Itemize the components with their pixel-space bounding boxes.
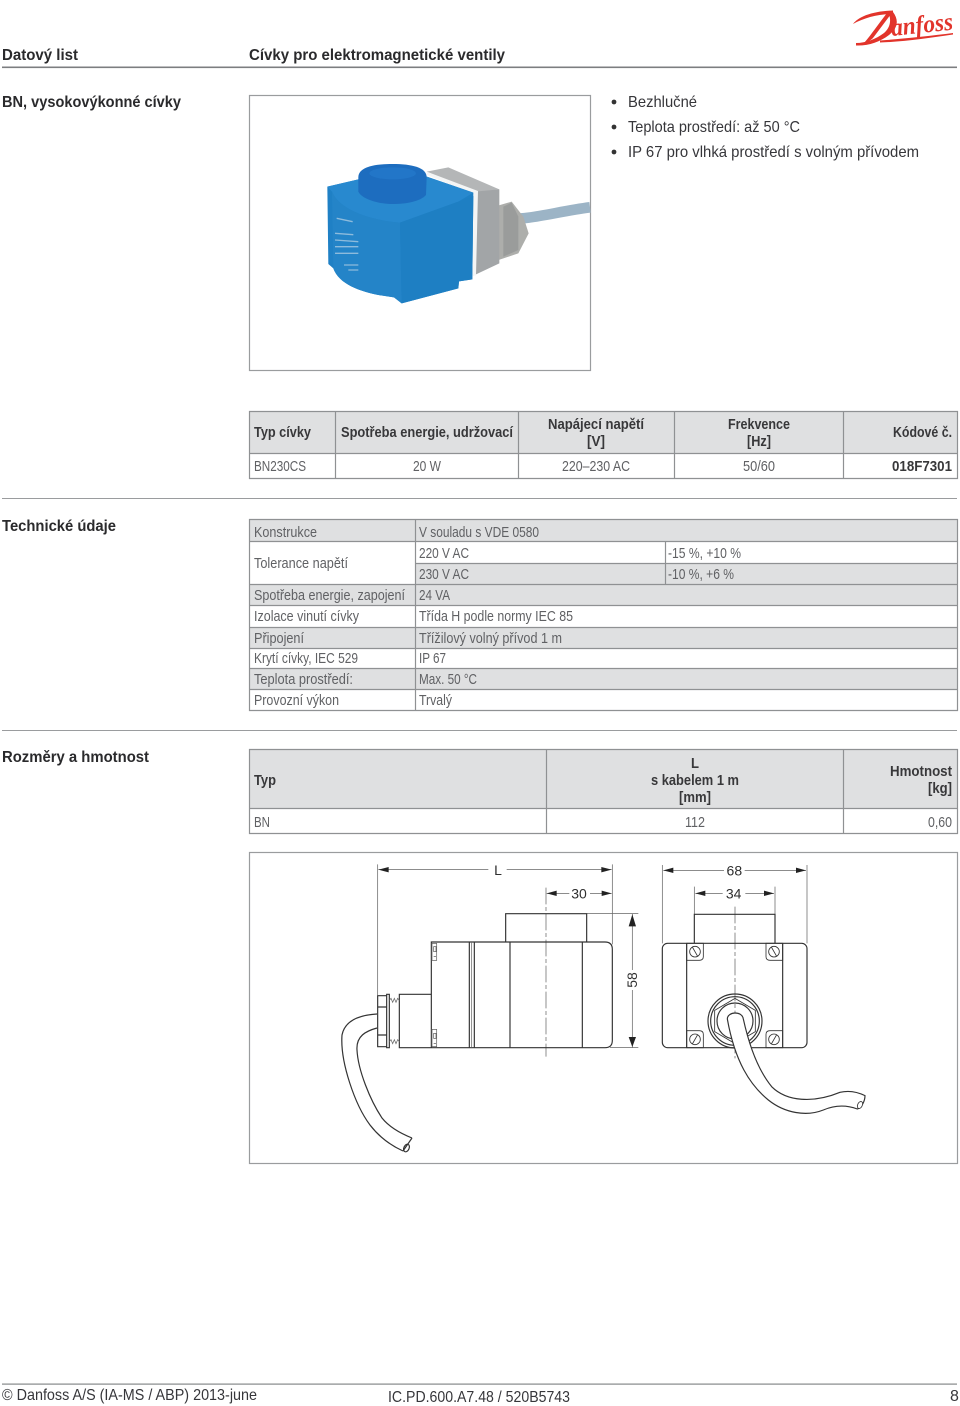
- table: technical data: [249, 520, 958, 710]
- coil body outline: [378, 914, 612, 1048]
- table: technical data: -10 %, +6 %: [668, 566, 734, 583]
- table: technical data: Provozní výkon: [254, 692, 339, 709]
- dimension 58: 58: [624, 972, 640, 988]
- table: coil specification: BN230CS: [254, 458, 306, 475]
- section heading: dimensions and weight: Rozměry a hmotnost: [2, 749, 150, 766]
- table: coil specification: [Hz]: [747, 433, 771, 450]
- screws: [687, 943, 783, 1048]
- cable gland: [708, 994, 762, 1048]
- table: dimensions and weight: [249, 749, 958, 834]
- feature bullet list: Bezhlučné: [628, 94, 697, 111]
- table: technical data: Tolerance napětí: [254, 555, 349, 572]
- table: coil specification: 50/60: [743, 458, 775, 475]
- page number: 8: [950, 1388, 959, 1405]
- table: dimensions and weight: Hmotnost: [890, 763, 952, 780]
- icon: solenoid coil photo: [327, 164, 590, 303]
- table: dimensions and weight: [kg]: [928, 780, 952, 797]
- table: technical data: Trvalý: [419, 692, 452, 709]
- panel: dimension drawing: [250, 852, 958, 1164]
- dimension 68: 68: [727, 863, 742, 879]
- table: dimensions and weight: 0,60: [928, 814, 952, 831]
- table: coil specification: 220–230 AC: [562, 458, 630, 475]
- cable: [727, 1013, 865, 1113]
- dimension L: L: [494, 862, 502, 878]
- section heading: technical data: Technické údaje: [2, 518, 116, 535]
- table: coil specification: [249, 411, 958, 478]
- logo: Danfoss: [853, 9, 954, 46]
- table: coil specification: 018F7301: [892, 458, 952, 475]
- table: technical data: 220 V AC: [419, 545, 469, 562]
- table: technical data: IP 67: [419, 650, 446, 667]
- dimension 30: 30: [571, 886, 587, 902]
- drawing: front view: [662, 863, 865, 1113]
- logo: Danfoss: anfoss: [890, 9, 954, 42]
- document code: IC.PD.600.A7.48 / 520B5743: [388, 1389, 570, 1406]
- table: coil specification: Typ cívky: [254, 424, 312, 441]
- document type heading: Datový list: [2, 47, 79, 64]
- table: technical data: Izolace vinutí cívky: [254, 608, 359, 625]
- header: [2, 47, 957, 68]
- table: technical data: Třížilový volný přívod 1 m: [419, 630, 562, 647]
- table: coil specification: Napájecí napětí: [548, 416, 645, 433]
- table: technical data: 230 V AC: [419, 566, 469, 583]
- dimension 34: 34: [726, 886, 742, 902]
- table: dimensions and weight: BN: [254, 814, 270, 831]
- table: technical data: Spotřeba energie, zapojení: [254, 587, 406, 604]
- dimension 30: [546, 886, 612, 1057]
- drawing: side view cable: [342, 1014, 412, 1153]
- table: coil specification: 20 W: [413, 458, 442, 475]
- table: technical data: Konstrukce: [254, 524, 317, 541]
- product photo panel: [250, 96, 590, 370]
- table: technical data: Třída H podle normy IEC 85: [419, 608, 573, 625]
- table: technical data: V souladu s VDE 0580: [419, 524, 539, 541]
- table: coil specification: [V]: [587, 433, 605, 450]
- table: technical data: Teplota prostředí:: [254, 671, 353, 688]
- table: technical data: Krytí cívky, IEC 529: [254, 650, 358, 667]
- feature bullet list: IP 67 pro vlhká prostředí s volným přívodem: [628, 144, 919, 161]
- footer: [2, 1384, 959, 1406]
- table: dimensions and weight: Typ: [254, 772, 276, 789]
- feature bullet list: [612, 94, 919, 161]
- section heading: BN coils: BN, vysokovýkonné cívky: [2, 94, 181, 111]
- coil face outline: [662, 907, 807, 1058]
- drawing: side view: [378, 862, 640, 1057]
- table: coil specification: Spotřeba energie, udržovací: [341, 424, 514, 441]
- table: technical data: Připojení: [254, 630, 305, 647]
- table: dimensions and weight: s kabelem 1 m: [651, 772, 739, 789]
- dimension 68: [662, 863, 807, 943]
- table: technical data: 24 VA: [419, 587, 450, 604]
- dimension 34: [694, 886, 775, 914]
- dimension L: [378, 862, 612, 995]
- table: technical data: Max. 50 °C: [419, 671, 477, 688]
- feature bullet list: Teplota prostředí: až 50 °C: [628, 119, 800, 136]
- document title: Cívky pro elektromagnetické ventily: [249, 47, 505, 64]
- table: dimensions and weight: 112: [685, 814, 705, 831]
- table: technical data: -15 %, +10 %: [668, 545, 741, 562]
- table: dimensions and weight: L: [691, 755, 699, 772]
- copyright: © Danfoss A/S (IA-MS / ABP) 2013-june: [2, 1387, 257, 1404]
- dimension 58: [587, 914, 640, 1048]
- table: dimensions and weight: [mm]: [679, 789, 711, 806]
- table: coil specification: Frekvence: [728, 416, 790, 433]
